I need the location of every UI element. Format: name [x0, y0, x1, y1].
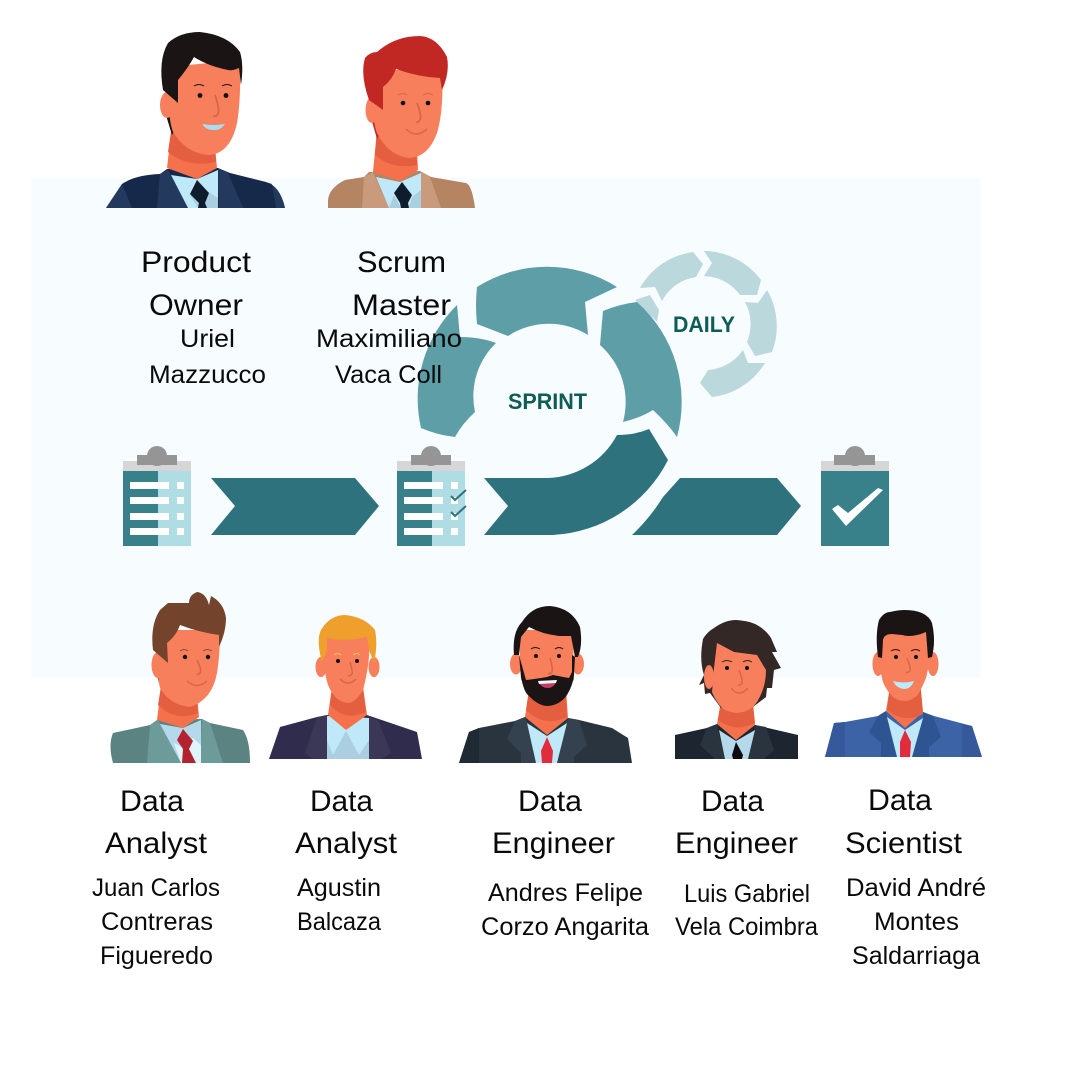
- text: product owner name: [149, 325, 266, 389]
- person: data analyst 2: [269, 615, 422, 759]
- text: data analyst 1: Data: [120, 785, 184, 818]
- neck: [886, 680, 923, 728]
- text: data analyst 2: Balcaza: [297, 908, 381, 936]
- text: data engineer 2: Luis Gabriel: [684, 880, 810, 908]
- text: scrum master name: Vaca Coll: [335, 361, 442, 389]
- text: data analyst 1: [92, 785, 220, 970]
- text: data scientist: Montes: [874, 908, 959, 936]
- label: sprint: SPRINT: [508, 389, 588, 414]
- suit: [825, 711, 982, 757]
- text: data engineer 1: Corzo Angarita: [481, 913, 649, 941]
- text: data analyst 2: Data: [310, 785, 373, 818]
- suit: [110, 719, 250, 763]
- text: scrum master role: Scrum: [357, 246, 446, 279]
- text: scrum master role: Master: [352, 289, 451, 322]
- neck: [373, 130, 418, 181]
- suit: [269, 715, 422, 759]
- text: data engineer 1: Data: [518, 785, 582, 818]
- arrow: backlog to sprint: [211, 478, 379, 535]
- daily cycle: [635, 251, 777, 397]
- text: data engineer 2: [675, 785, 818, 941]
- text: data analyst 2: [295, 785, 398, 936]
- person: data analyst 1: [110, 592, 250, 763]
- sprint top segment: [476, 267, 617, 336]
- text: data engineer 2: Vela Coimbra: [675, 913, 818, 941]
- icon: sprint backlog clipboard: [397, 446, 466, 546]
- text: data engineer 2: Engineer: [675, 827, 798, 860]
- text: data engineer 1: Andres Felipe: [488, 879, 643, 907]
- head: [316, 657, 326, 677]
- text: data scientist: Scientist: [845, 827, 963, 860]
- neck: [157, 680, 199, 728]
- head: [510, 654, 522, 674]
- person: data engineer 1: [459, 606, 632, 763]
- neck: [167, 125, 217, 179]
- head: [699, 620, 781, 708]
- suit: [459, 717, 632, 763]
- text: data analyst 1: Figueredo: [100, 942, 213, 970]
- text: data analyst 1: Analyst: [105, 827, 208, 860]
- head: [371, 118, 385, 139]
- sprint right segment: [600, 302, 682, 437]
- text: product owner name: Mazzucco: [149, 361, 266, 389]
- text: product owner role: [141, 246, 252, 322]
- suit: [106, 168, 285, 208]
- head: [165, 112, 180, 135]
- text: data analyst 1: Juan Carlos: [92, 874, 220, 902]
- person: scrum master: [328, 36, 475, 208]
- text: data scientist: [845, 784, 986, 970]
- text: scrum master name: Maximiliano: [316, 325, 462, 353]
- beard and mouth: [519, 655, 575, 706]
- text: data scientist: David André: [846, 874, 986, 902]
- suit: [328, 171, 475, 208]
- person: data engineer 2: [675, 620, 798, 759]
- neck: [328, 680, 367, 730]
- text: data scientist: Saldarriaga: [852, 942, 980, 970]
- text: data engineer 1: [481, 785, 649, 941]
- text: data analyst 1: Contreras: [101, 908, 213, 936]
- icon: product backlog clipboard: [123, 446, 191, 546]
- label: daily: DAILY: [673, 312, 735, 337]
- sprint cycle diagram: [418, 251, 777, 535]
- head: [872, 652, 884, 676]
- text: data analyst 2: Agustin: [297, 874, 381, 902]
- text: data engineer 1: Engineer: [492, 827, 615, 860]
- sprint left segment: [418, 305, 496, 437]
- head: [156, 670, 170, 690]
- icon: done clipboard: [821, 446, 889, 546]
- person: product owner: [106, 32, 285, 208]
- text: product owner name: Uriel: [180, 325, 235, 353]
- arrow: sprint to done: [632, 478, 801, 535]
- suit: [675, 724, 798, 759]
- text: product owner role: Product: [141, 246, 252, 279]
- text: data scientist: Data: [868, 784, 932, 817]
- text: scrum master role: [352, 246, 451, 322]
- text: data analyst 2: Analyst: [295, 827, 398, 860]
- person: data scientist: [825, 610, 982, 757]
- text: scrum master name: [316, 325, 462, 389]
- sprint bottom arrow segment: [484, 429, 668, 535]
- panel: light background: [31, 178, 981, 678]
- text: data engineer 2: Data: [701, 785, 764, 818]
- neck: [717, 695, 755, 740]
- text: product owner role: Owner: [149, 289, 243, 322]
- neck: [525, 690, 568, 735]
